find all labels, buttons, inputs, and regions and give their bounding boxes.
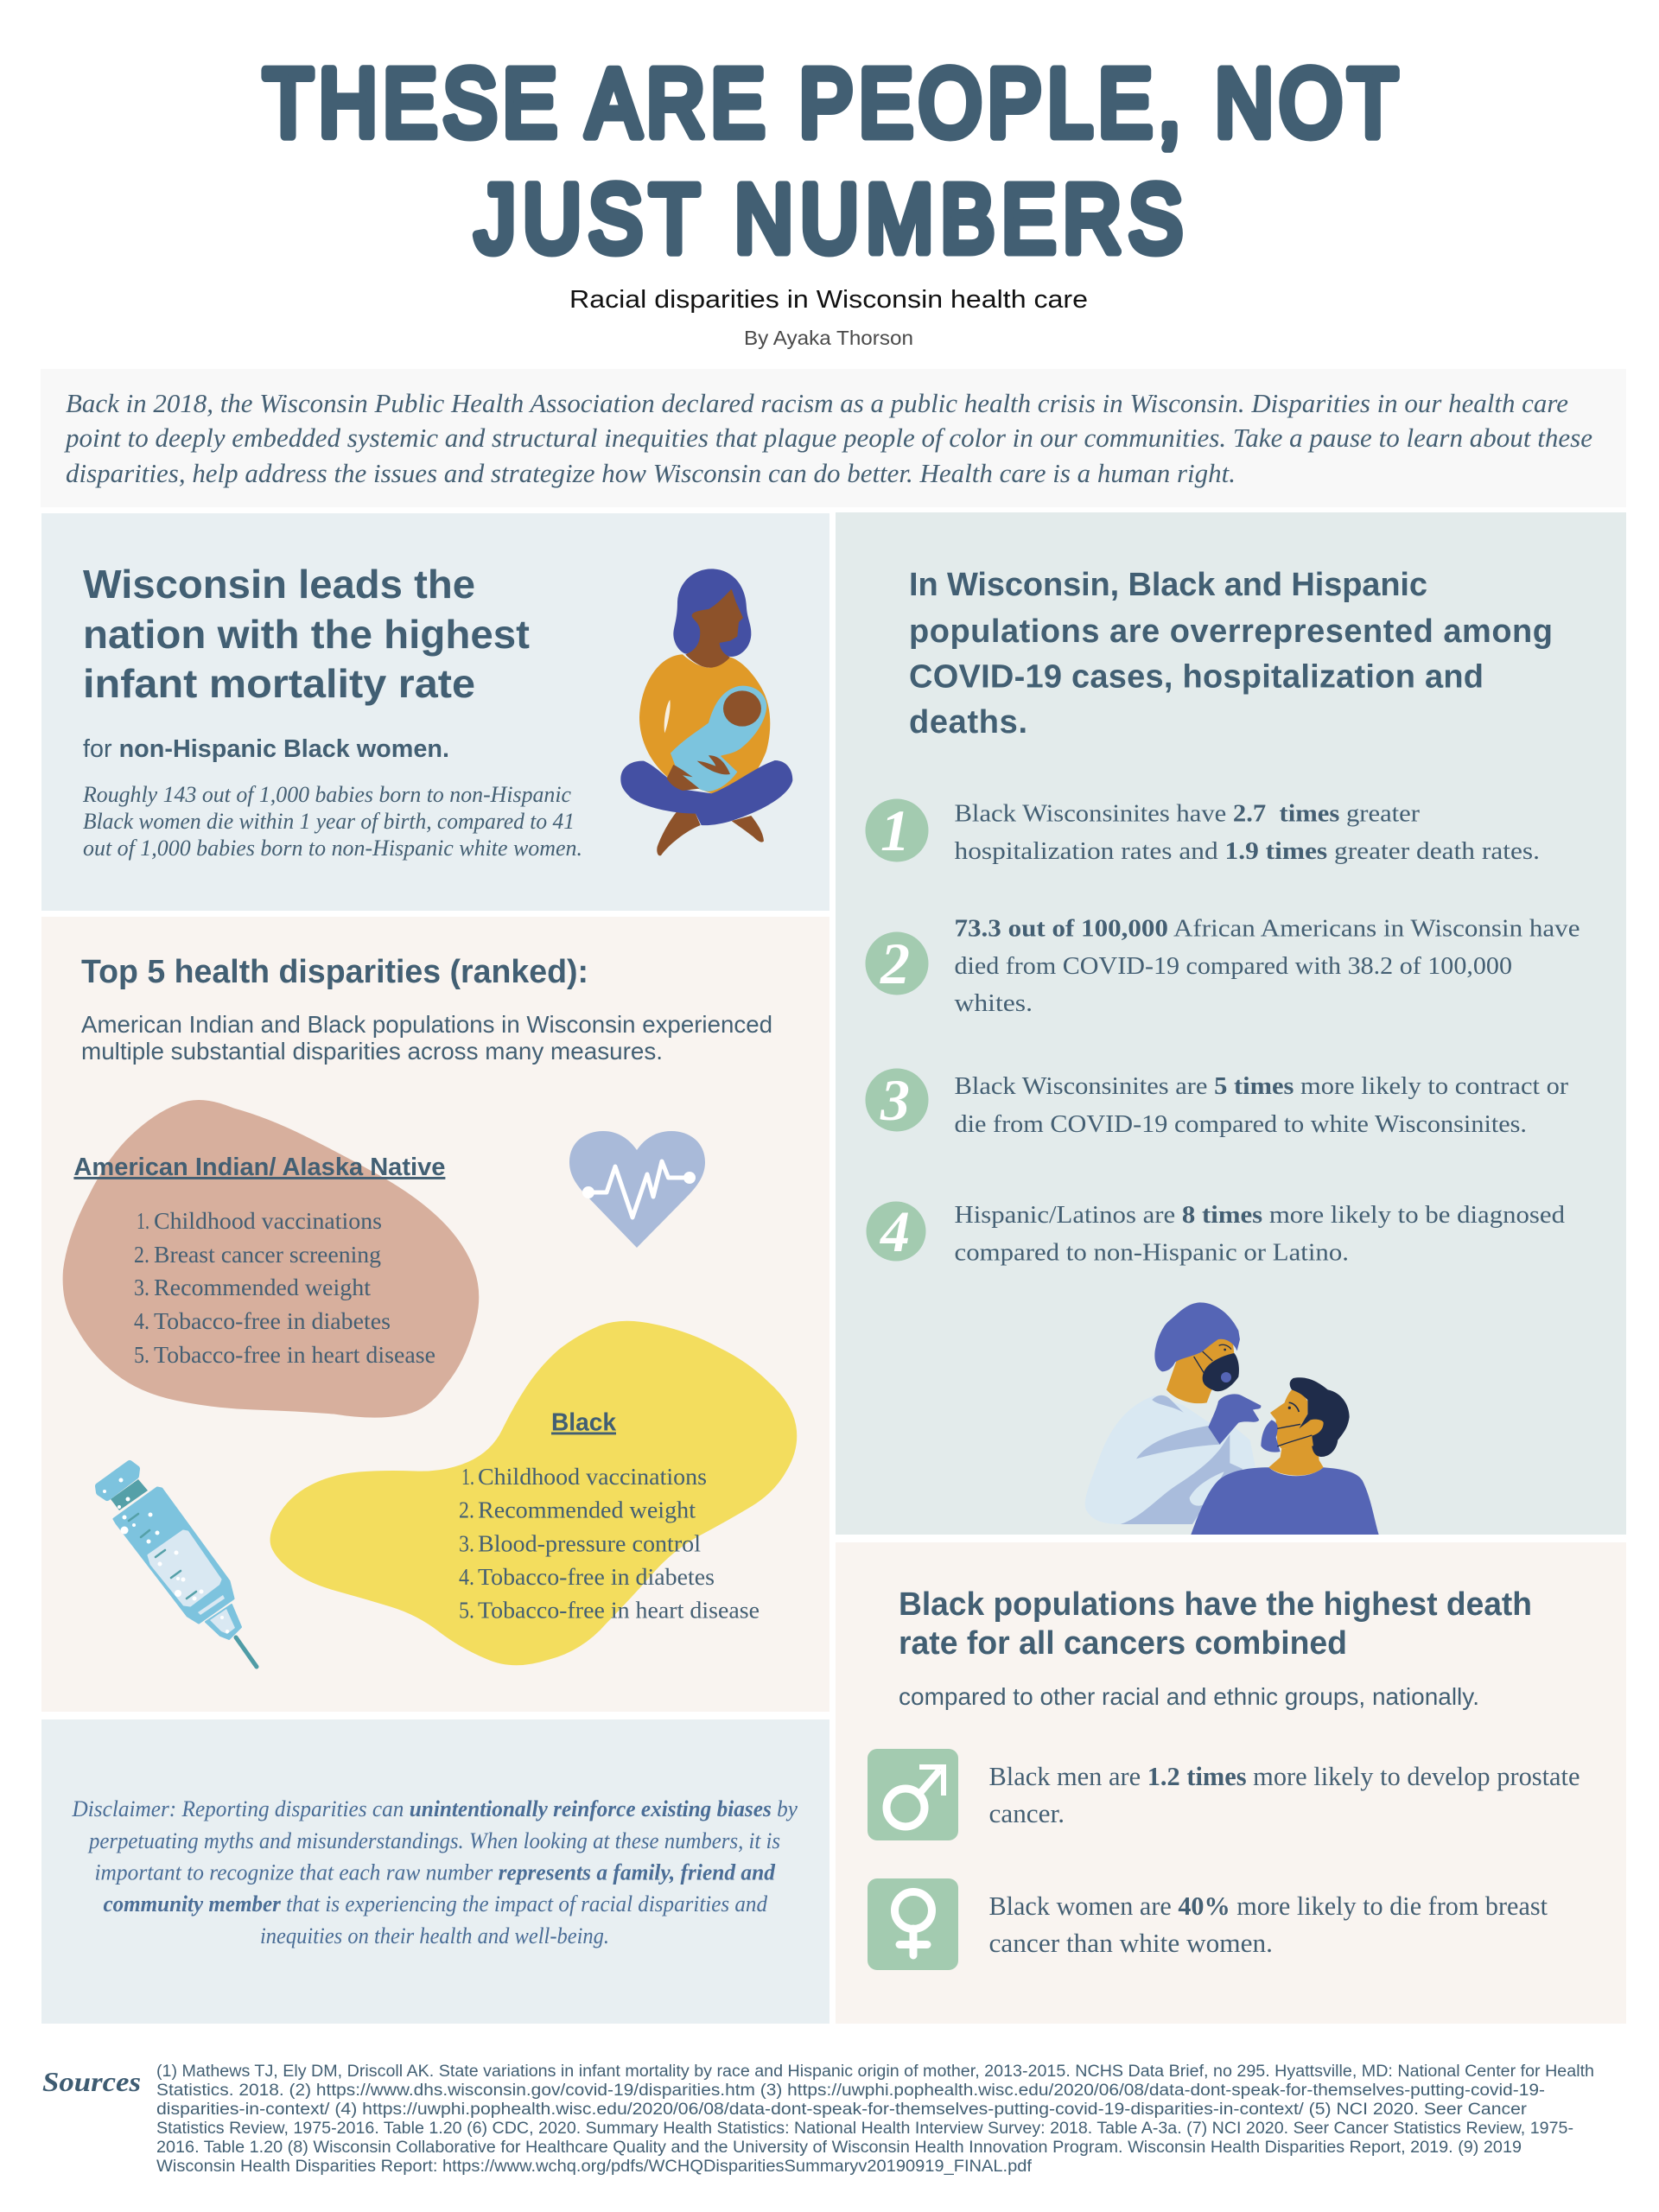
text block: compared nationally: compared to other racial and ethnic groups, nationally.: [899, 1683, 1479, 1710]
sources list: disparities-in-context/ (4) https://uwphi.pophealth.wisc.edu/2020/06/08/data-dont-speak-for-themselves-putting-covid-19-disparities-in-context/ (5) NCI 2020. Seer Cancer: [156, 2101, 1528, 2119]
heading: COVID-19: COVID-19 cases, hospitalization and: [909, 658, 1484, 695]
blob: American Indian / Alaska Native list: Childhood vaccinations: [154, 1208, 382, 1234]
text block: men prostate cancer: [988, 1761, 1580, 1828]
blob: Black population list: 3.: [459, 1531, 474, 1557]
sources label: Sources: [42, 2066, 141, 2097]
blob: American Indian / Alaska Native list: American Indian/ Alaska Native: [73, 1154, 445, 1181]
item 1: hospitalization: [866, 798, 1540, 865]
heading: infant mortality: nation with the highest: [83, 612, 530, 657]
icon: mother holding baby: [620, 569, 792, 855]
heading: COVID-19: In Wisconsin, Black and Hispanic: [909, 567, 1427, 603]
icon: syringe: [99, 1464, 257, 1667]
blob: American Indian / Alaska Native list: Breast cancer screening: [154, 1242, 381, 1268]
blob: American Indian / Alaska Native list: 5.: [134, 1342, 149, 1368]
blob: Black population list: Recommended weight: [478, 1497, 696, 1522]
panel: COVID-19: [836, 512, 1626, 1535]
heading: top 5: Top 5 health disparities (ranked):: [81, 954, 588, 990]
panel: introduction: Back in 2018, the Wisconsin Public Health Association declared racism as a public health crisis in Wisconsin. Disparities in our health care: [66, 388, 1568, 418]
text block: top 5 description: [81, 1011, 772, 1065]
heading: infant mortality: infant mortality rate: [83, 661, 475, 706]
heading: infant mortality: Wisconsin leads the: [83, 562, 475, 607]
sources list: Statistics Review, 1975-2016. Table 1.20 (6) CDC, 2020. Summary Health Statistics: National Health Interview Survey: 2018. Table A-3a. (7) NCI 2020. Seer Cancer Statistics Review, 1975-: [156, 2120, 1573, 2138]
item 4: diagnosed: [866, 1198, 1566, 1267]
blob: Black population list: Tobacco-free in heart disease: [478, 1597, 760, 1623]
item 4: diagnosed: compared to non-Hispanic or Latino.: [954, 1239, 1349, 1267]
text block: infant mortality statistic: out of 1,000 babies born to non-Hispanic white women.: [83, 836, 582, 861]
item 1: hospitalization: Black Wisconsinites have 2.7 times greater: [954, 800, 1420, 828]
blob: American Indian / Alaska Native list: 2.: [134, 1242, 149, 1268]
item 4: diagnosed: 4: [879, 1198, 910, 1264]
item 3: contract or die: Black Wisconsinites are 5 times more likely to contract or: [954, 1072, 1568, 1100]
item 1: hospitalization: 1: [880, 798, 910, 863]
sources list: Statistics. 2018. (2) https://www.dhs.wisconsin.gov/covid-19/disparities.htm (3) https://uwphi.pophealth.wisc.edu/2020/06/08/data-dont-speak-for-themselves-putting-covid-19-: [156, 2082, 1545, 2100]
icon: male symbol: [868, 1749, 958, 1840]
icon: health worker testing patient: [1085, 1302, 1379, 1535]
sources list: (1) Mathews TJ, Ely DM, Driscoll AK. State variations in infant mortality by race and Hispanic origin of mother, 2013-2015. NCHS Data Brief, no 295. Hyattsville, MD: National Center for Health: [156, 2063, 1594, 2081]
item 2: deaths: 2: [880, 931, 910, 996]
panel: disclaimer: important to recognize that each raw number represents a family, friend and: [95, 1859, 776, 1885]
icon: female symbol: [868, 1878, 958, 1970]
panel: top 5 health disparities: [41, 917, 830, 1712]
text block: infant mortality statistic: Black women die within 1 year of birth, compared to 41: [83, 809, 575, 834]
panel: disclaimer: [41, 1719, 830, 2024]
title: JUST NUMBERS: [475, 166, 1183, 272]
subtitle: Racial disparities in Wisconsin health care: [569, 286, 1088, 314]
title: [264, 50, 1397, 272]
panel: disclaimer: inequities on their health and well-being.: [260, 1923, 609, 1948]
sources list: 2016. Table 1.20 (8) Wisconsin Collaborative for Healthcare Quality and the University of Wisconsin Health Innovation Program. Wisconsin Health Disparities Report, 2019. (9) 2019: [156, 2139, 1522, 2157]
blob: Black population list: Tobacco-free in diabetes: [478, 1564, 715, 1590]
byline: By Ayaka Thorson: [744, 327, 913, 349]
item 2: deaths: 73.3 out of 100,000 African Americans in Wisconsin have: [954, 914, 1580, 942]
blob: American Indian / Alaska Native list: [63, 1100, 479, 1418]
panel: introduction: disparities, help address the issues and strategize how Wisconsin can do better. Health care is a human right.: [66, 458, 1236, 488]
panel: infant mortality: [41, 513, 830, 911]
heading: cancer: [899, 1586, 1532, 1662]
item 4: diagnosed: Hispanic/Latinos are 8 times more likely to be diagnosed: [954, 1201, 1566, 1229]
panel: disclaimer: Disclaimer: Reporting disparities can unintentionally reinforce existing biases by: [72, 1796, 798, 1821]
text block: women breast cancer: [988, 1891, 1548, 1958]
blob: Black population list: Blood-pressure control: [478, 1531, 701, 1557]
blob: Black population list: 5.: [459, 1597, 474, 1623]
heading: COVID-19: deaths.: [909, 704, 1027, 741]
item 3: contract or die: [866, 1067, 1568, 1138]
panel: introduction: point to deeply embedded systemic and structural inequities that plague people of color in our communities. Take a pause to learn about these: [64, 423, 1592, 453]
icon: heart with pulse line: [569, 1131, 705, 1248]
text block: women breast cancer: Black women are 40% more likely to die from breast: [988, 1891, 1548, 1921]
text block: top 5 description: multiple substantial disparities across many measures.: [81, 1038, 663, 1065]
item 3: contract or die: 3: [880, 1067, 910, 1133]
text block: infant mortality statistic: [82, 782, 582, 861]
blob: American Indian / Alaska Native list: Recommended weight: [154, 1274, 372, 1300]
title: THESE ARE PEOPLE, NOT: [264, 50, 1397, 156]
blob: Black population list: 1.: [461, 1464, 474, 1490]
sources list: [156, 2063, 1594, 2176]
panel: introduction: [41, 369, 1626, 507]
panel: disclaimer: perpetuating myths and misunderstandings. When looking at these numbers, it is: [87, 1828, 780, 1853]
blob: Black population list: Childhood vaccinations: [478, 1464, 707, 1490]
text block: top 5 description: American Indian and Black populations in Wisconsin experienced: [81, 1011, 772, 1038]
item 3: contract or die: die from COVID-19 compared to white Wisconsinites.: [954, 1110, 1527, 1138]
heading: cancer: rate for all cancers combined: [899, 1625, 1347, 1662]
panel: disclaimer: community member that is experiencing the impact of racial disparities and: [104, 1891, 768, 1916]
text block: men prostate cancer: cancer.: [988, 1798, 1065, 1828]
blob: Black population list: [270, 1321, 797, 1665]
heading: infant mortality: [83, 562, 530, 706]
heading: COVID-19: [909, 567, 1553, 741]
blob: Black population list: Black: [551, 1408, 617, 1436]
subheading: non-Hispanic Black women: for non-Hispanic Black women.: [83, 735, 449, 763]
item 2: deaths: died from COVID-19 compared with 38.2 of 100,000: [954, 952, 1512, 980]
blob: Black population list: 4.: [459, 1564, 474, 1590]
panel: cancer: [836, 1542, 1626, 2024]
text block: men prostate cancer: Black men are 1.2 times more likely to develop prostate: [988, 1761, 1580, 1791]
text block: infant mortality statistic: Roughly 143 out of 1,000 babies born to non-Hispanic: [82, 782, 571, 807]
blob: American Indian / Alaska Native list: 4.: [134, 1308, 149, 1334]
sources list: Wisconsin Health Disparities Report: https://www.wchq.org/pdfs/WCHQDisparitiesSummaryv20190919_FINAL.pdf: [156, 2158, 1033, 2176]
item 2: deaths: [866, 914, 1580, 1017]
text block: women breast cancer: cancer than white women.: [988, 1928, 1273, 1958]
blob: American Indian / Alaska Native list: 3.: [134, 1274, 149, 1300]
heading: cancer: Black populations have the highest death: [899, 1586, 1532, 1623]
blob: American Indian / Alaska Native list: Tobacco-free in diabetes: [154, 1308, 391, 1334]
item 1: hospitalization: hospitalization rates and 1.9 times greater death rates.: [954, 837, 1540, 865]
blob: American Indian / Alaska Native list: 1.: [137, 1208, 149, 1234]
item 2: deaths: whites.: [954, 989, 1033, 1017]
blob: American Indian / Alaska Native list: Tobacco-free in heart disease: [154, 1342, 435, 1368]
heading: COVID-19: populations are overrepresented among: [909, 613, 1553, 650]
blob: Black population list: 2.: [459, 1497, 474, 1522]
